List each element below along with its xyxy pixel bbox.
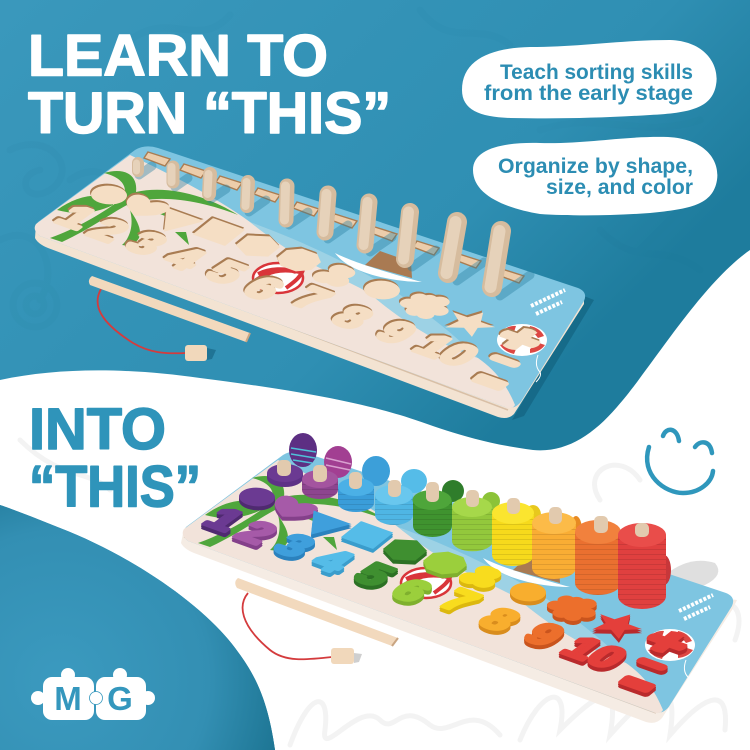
fishing rod: top [89, 276, 250, 361]
number and shape cut-outs: 2 [78, 213, 139, 248]
background pattern: pale squiggles on white [20, 440, 739, 745]
finished board with colourful pieces: 8 [469, 602, 530, 637]
number and shape cut-outs [46, 182, 551, 392]
title: learn to turn this: LEARN TO [28, 24, 328, 88]
fishing rod: bottom [235, 578, 398, 664]
peg highlights [136, 163, 500, 287]
wooden pegs [138, 163, 501, 287]
number and shape cut-outs: 9 [366, 315, 427, 350]
board shadow: finished board [665, 561, 718, 590]
finished board with colourful pieces: 4 [302, 543, 363, 579]
title: learn to turn this [28, 24, 391, 146]
heading: into this: INTO [29, 397, 166, 462]
coloured shape pieces [232, 484, 282, 510]
callout: organize by shape: size, and color [546, 176, 693, 199]
title: learn to turn this: TURN “THIS” [28, 81, 391, 146]
number and shape cut-outs: 5 [196, 255, 257, 290]
callout: organize by shape: Organize by shape, [498, 155, 693, 178]
peg shadows [139, 166, 530, 296]
wooden pegs on stacks [277, 460, 649, 537]
callout: organize by shape [473, 137, 717, 215]
lower-left blue blob [0, 505, 275, 750]
white wave panel [0, 250, 750, 750]
number and shape cut-outs: 3 [116, 226, 177, 261]
unfinished wooden board [35, 146, 585, 418]
logo: MG puzzle: M [54, 680, 82, 717]
heading: into this [29, 397, 201, 520]
colour stacks [267, 464, 666, 609]
icon: smile [647, 430, 713, 493]
finished board with colourful pieces [181, 433, 737, 723]
finished board with colourful pieces: 9 [514, 617, 575, 652]
peg slots [144, 152, 524, 283]
finished board with colourful pieces: 5 [344, 557, 405, 592]
callout: sorting skills [462, 40, 717, 118]
callout: sorting skills: Teach sorting skills [500, 61, 693, 84]
back fish pieces [289, 433, 671, 585]
number and shape cut-outs: 8 [322, 300, 383, 335]
finished board with colourful pieces: 7 [429, 583, 490, 618]
finished board with colourful pieces: 6 [381, 573, 442, 608]
finished board with colourful pieces: 3 [264, 528, 325, 563]
callout: sorting skills: from the early stage [484, 82, 693, 105]
finished board with colourful pieces: 10 [551, 630, 637, 675]
number and shape cut-outs: 1 [46, 200, 107, 235]
heading: into this: “THIS” [29, 454, 201, 520]
logo: MG puzzle [31, 668, 155, 720]
board shadow: unfinished board [512, 296, 594, 420]
number and shape cut-outs: 6 [233, 271, 294, 306]
number and shape cut-outs: 4 [154, 241, 215, 277]
finished board with colourful pieces: 2 [226, 515, 287, 550]
logo: MG puzzle: G [107, 680, 133, 717]
coloured numbers: 1 [194, 502, 255, 537]
number and shape cut-outs: 10 [403, 328, 489, 373]
number and shape cut-outs: 7 [281, 281, 342, 316]
